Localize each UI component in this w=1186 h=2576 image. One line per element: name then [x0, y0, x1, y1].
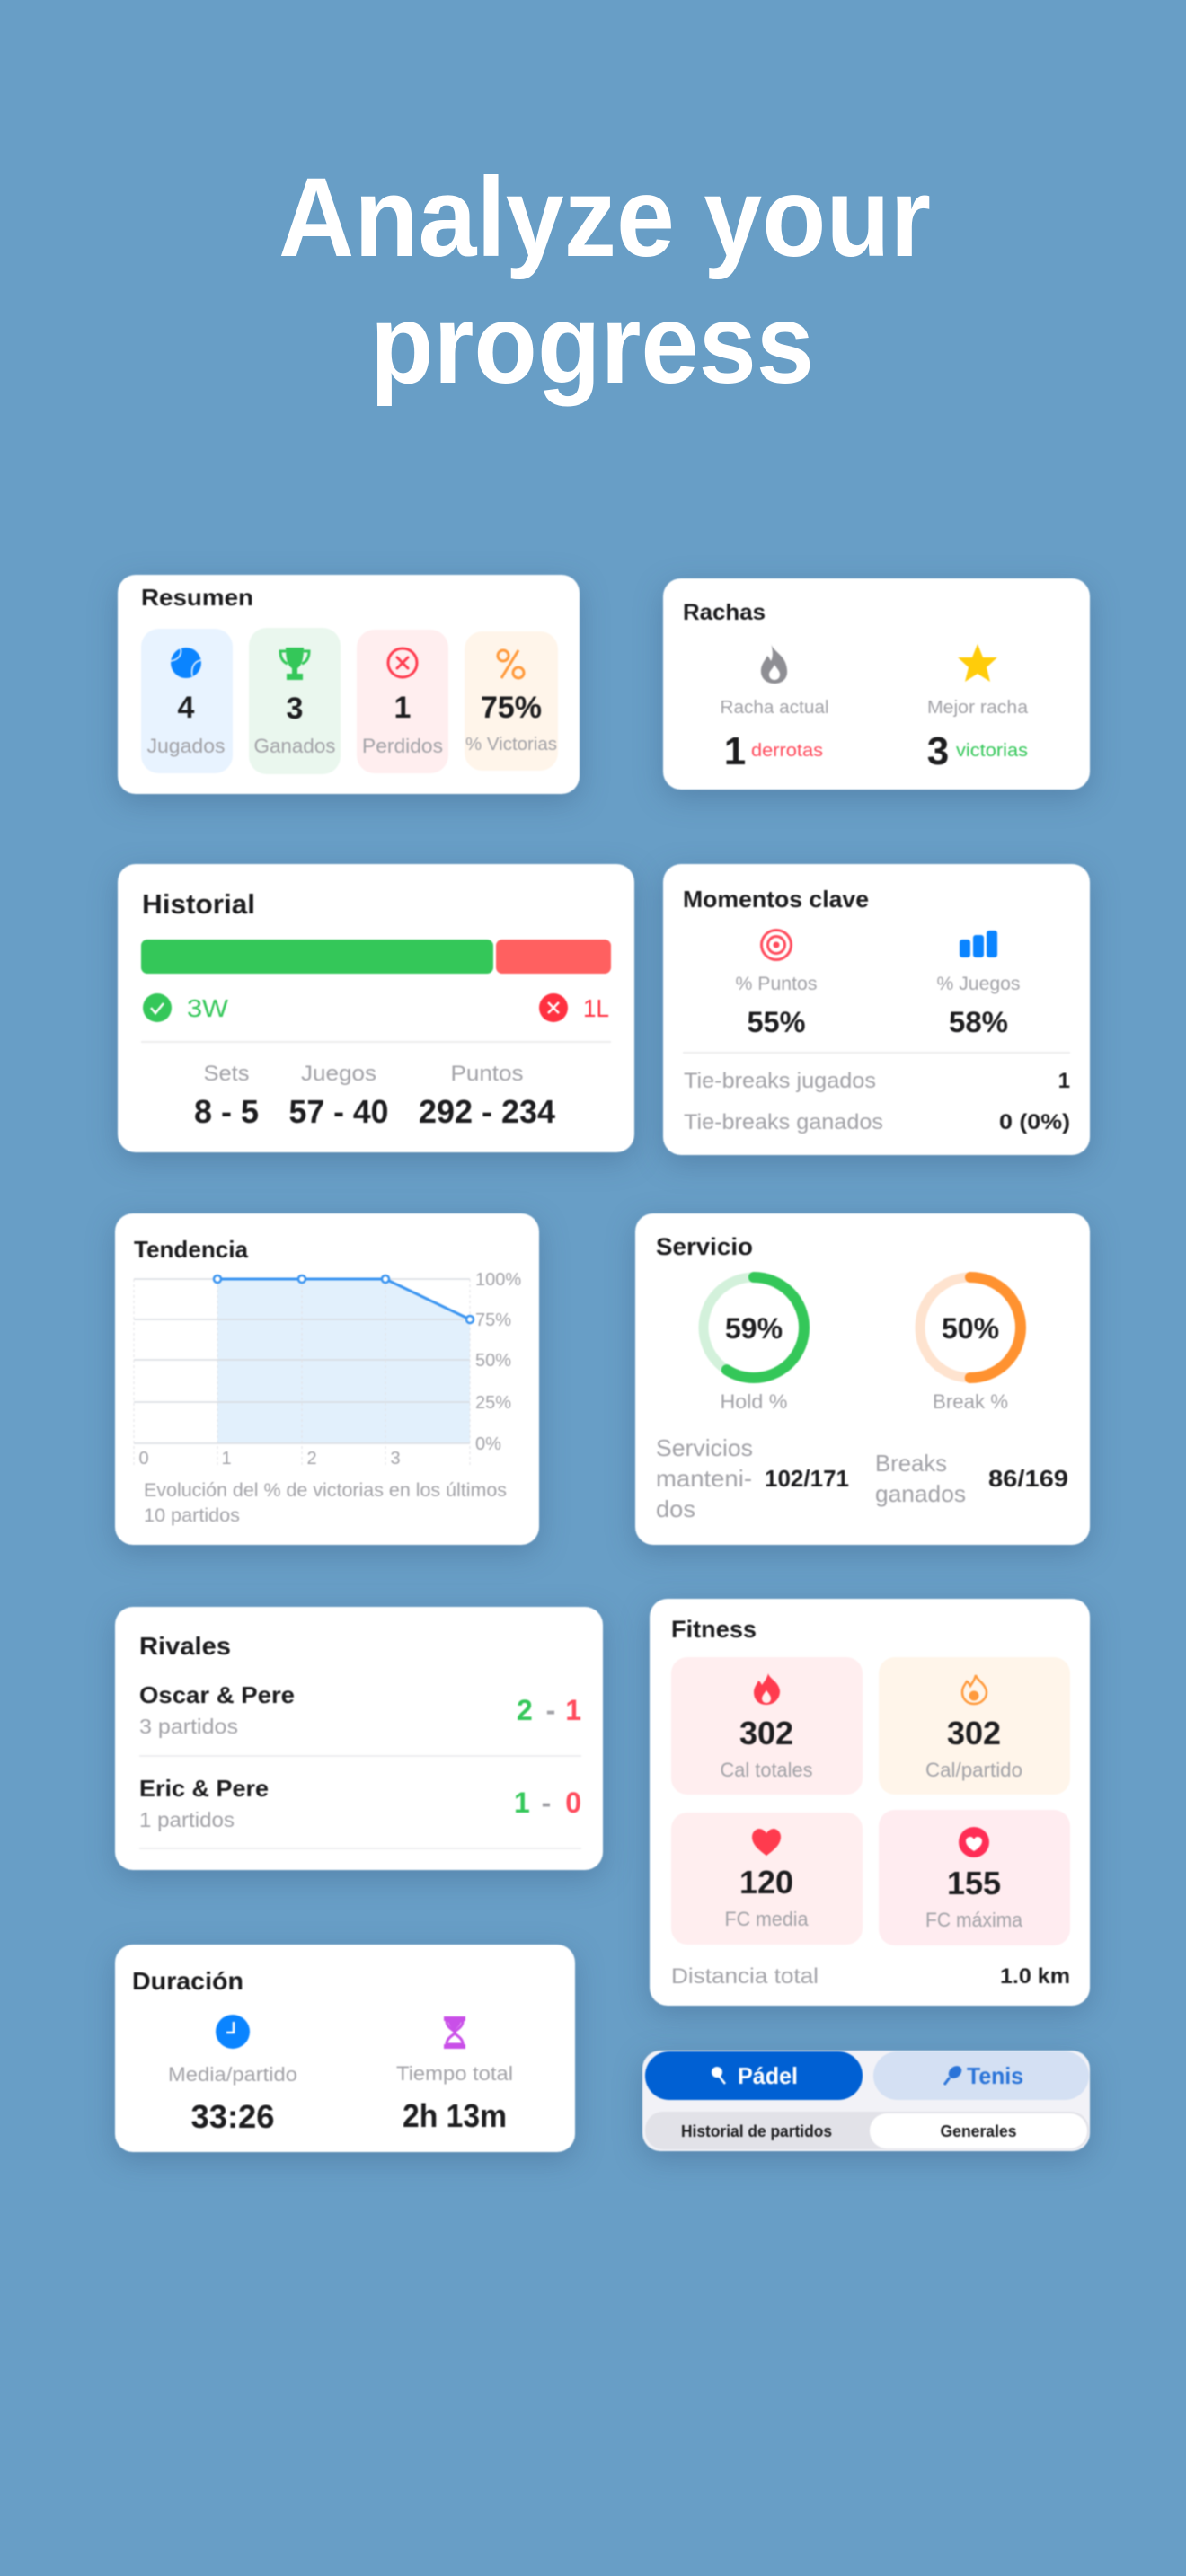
stat: servicios mantenidos: Servicios: [656, 1434, 753, 1461]
tile: victorias: % Victorias: [465, 735, 557, 754]
icon: flame: [761, 643, 787, 684]
stat: tiempo total: 2h 13m: [403, 2097, 507, 2134]
line chart: 50%: [475, 1351, 511, 1371]
tab: tenis: Tenis: [967, 2062, 1023, 2089]
stat: servicios mantenidos: dos: [656, 1495, 695, 1522]
heading: tendencia: Tendencia: [134, 1236, 249, 1263]
donut: break: [920, 1277, 1021, 1413]
donut: hold: [704, 1277, 804, 1413]
segmented control: [645, 2112, 1089, 2149]
donut: hold: 59%: [725, 1312, 783, 1345]
icon: clock: [216, 2015, 250, 2049]
stat: % juegos: % Juegos: [936, 974, 1021, 994]
stat: puntos: [419, 1062, 555, 1130]
stat: breaks ganados: [875, 1450, 1068, 1507]
caption: 10 partidos: [144, 1505, 240, 1526]
line chart: 100%: [475, 1270, 521, 1290]
value: racha actual: 1: [724, 729, 746, 773]
tile: fc media: 120: [739, 1864, 793, 1901]
tile: cal/partido: Cal/partido: [925, 1759, 1022, 1781]
heading: rachas: Rachas: [683, 600, 766, 625]
stat: juegos: 57 - 40: [289, 1093, 388, 1130]
tile: perdidos: 1: [394, 691, 411, 725]
icon: star: [958, 644, 997, 682]
tile: victorias: 75%: [481, 691, 542, 725]
panel: duracion: [115, 1945, 575, 2152]
tile: fc maxima: [879, 1810, 1070, 1945]
stat: sets: [194, 1062, 259, 1130]
tile: ganados: 3: [287, 692, 303, 726]
heading: fitness: Fitness: [671, 1616, 757, 1643]
tab: tenis: [873, 2051, 1089, 2100]
panel: rachas: [663, 578, 1090, 790]
title: progress: [370, 282, 814, 407]
line chart: 3: [390, 1449, 401, 1469]
value: mejor racha: 3: [927, 729, 949, 773]
row: tie-breaks jugados: 1: [1058, 1069, 1070, 1093]
tile: fc media: FC media: [724, 1908, 809, 1930]
row: tie-breaks ganados: [684, 1110, 1070, 1134]
stat: juegos: [289, 1062, 388, 1130]
icon: target: [762, 931, 791, 959]
row: tie-breaks ganados: Tie-breaks ganados: [684, 1110, 883, 1134]
icon: hourglass: [444, 2016, 465, 2049]
heading: resumen: Resumen: [141, 584, 253, 611]
stat: % puntos: [735, 974, 818, 1038]
row: distancia total: [671, 1964, 1070, 1989]
stat: juegos: Juegos: [301, 1062, 376, 1086]
value: mejor racha: victorias: [956, 741, 1028, 761]
stat: % puntos: % Puntos: [735, 974, 818, 994]
donut: break: Break %: [933, 1390, 1008, 1413]
heading: rivales: Rivales: [139, 1632, 231, 1660]
segmented control: Generales: [940, 2122, 1017, 2140]
stat: breaks ganados: Breaks: [875, 1450, 947, 1477]
heading: momentos clave: Momentos clave: [683, 886, 869, 913]
stat: media/partido: [168, 2063, 297, 2135]
row: oscar & pere: [139, 1681, 581, 1738]
row: oscar & pere: 3 partidos: [139, 1715, 238, 1738]
stat: tiempo total: [396, 2062, 513, 2134]
line chart: 0: [138, 1449, 149, 1469]
tile: cal/partido: [879, 1657, 1070, 1795]
tile: perdidos: [357, 630, 448, 773]
stat: servicios mantenidos: 102/171: [765, 1465, 849, 1492]
row: eric & pere: 1: [514, 1786, 530, 1819]
line chart: 75%: [475, 1310, 511, 1330]
tile: jugados: Jugados: [147, 735, 225, 757]
stat: puntos: 292 - 234: [419, 1093, 555, 1130]
caption: [144, 1480, 507, 1526]
tile: cal/partido: 302: [947, 1715, 1001, 1751]
heading: servicio: Servicio: [656, 1233, 753, 1260]
tile: fc media: [671, 1813, 863, 1945]
panel: tendencia: [115, 1213, 539, 1545]
row: distancia total: Distancia total: [671, 1964, 819, 1989]
wins: 3W: [187, 994, 229, 1022]
stat: servicios mantenidos: [656, 1434, 849, 1522]
row: eric & pere: [139, 1775, 581, 1831]
heading: duracion: Duración: [132, 1967, 243, 1995]
stacked bar: [141, 940, 611, 974]
panel: momentos clave: [663, 864, 1090, 1155]
value: racha actual: derrotas: [751, 741, 823, 761]
tile: cal totales: [671, 1657, 863, 1795]
line chart: 2: [306, 1449, 317, 1469]
row: tie-breaks jugados: [684, 1069, 1070, 1093]
tab: padel: [645, 2051, 863, 2100]
tab: padel: Pádel: [738, 2062, 798, 2089]
line chart: [134, 1270, 521, 1469]
stat: sets: Sets: [203, 1062, 250, 1086]
tile: jugados: 4: [178, 691, 195, 725]
stat: breaks ganados: ganados: [875, 1480, 966, 1507]
tile: fc maxima: 155: [947, 1865, 1001, 1901]
panel: rivales: [115, 1607, 603, 1870]
panel: servicio: [635, 1213, 1090, 1545]
row: tie-breaks ganados: 0 (0%): [999, 1110, 1070, 1134]
icon: bars: [960, 931, 997, 957]
tile: perdidos: Perdidos: [362, 735, 443, 757]
panel: fitness: [650, 1599, 1090, 2006]
tile: cal totales: Cal totales: [721, 1759, 812, 1781]
losses: 1L: [583, 994, 609, 1022]
tile: jugados: [141, 629, 233, 773]
panel: resumen: [118, 575, 580, 794]
stat: sets: 8 - 5: [194, 1093, 259, 1130]
tile: victorias: [465, 631, 558, 771]
line chart: 0%: [475, 1434, 501, 1454]
value: mejor racha: [927, 729, 1028, 773]
row: eric & pere: 0: [565, 1786, 581, 1819]
label: mejor racha: Mejor racha: [927, 698, 1029, 718]
row: oscar & pere: 1: [565, 1694, 581, 1726]
losses: [539, 993, 609, 1022]
wins: [143, 993, 229, 1022]
heading: historial: Historial: [142, 888, 255, 920]
tile: ganados: [249, 628, 341, 774]
title: Analyze your: [279, 155, 931, 280]
stat: % juegos: 58%: [949, 1006, 1008, 1038]
tile: ganados: Ganados: [253, 735, 336, 757]
row: oscar & pere: Oscar & Pere: [139, 1681, 295, 1708]
panel: historial: [118, 864, 634, 1152]
stat: servicios mantenidos: manteni-: [656, 1465, 752, 1492]
panel: navigation tabs: [642, 2051, 1090, 2151]
caption: Evolución del % de victorias en los últimos: [144, 1480, 507, 1501]
stat: % juegos: [936, 974, 1021, 1038]
tile: cal totales: 302: [739, 1715, 793, 1751]
value: racha actual: [724, 729, 823, 773]
donut: break: 50%: [942, 1312, 999, 1345]
stat: puntos: Puntos: [451, 1062, 523, 1086]
label: racha actual: Racha actual: [721, 698, 828, 718]
title: [279, 155, 931, 407]
stat: media/partido: Media/partido: [168, 2063, 297, 2086]
row: distancia total: 1.0 km: [1000, 1964, 1070, 1989]
line chart: 1: [221, 1449, 232, 1469]
row: eric & pere: -: [542, 1786, 551, 1819]
stat: media/partido: 33:26: [190, 2098, 275, 2135]
row: oscar & pere: 2: [517, 1694, 533, 1726]
row: oscar & pere: -: [546, 1694, 555, 1726]
line chart: 25%: [475, 1393, 511, 1413]
row: eric & pere: 1 partidos: [139, 1808, 235, 1831]
stat: breaks ganados: 86/169: [988, 1465, 1068, 1492]
row: tie-breaks jugados: Tie-breaks jugados: [684, 1069, 876, 1093]
stat: tiempo total: Tiempo total: [396, 2062, 513, 2085]
tile: fc maxima: FC máxima: [925, 1909, 1023, 1931]
donut: hold: Hold %: [721, 1390, 787, 1413]
stat: % puntos: 55%: [748, 1006, 805, 1038]
row: eric & pere: Eric & Pere: [139, 1775, 269, 1802]
segmented control: Historial de partidos: [681, 2122, 832, 2140]
